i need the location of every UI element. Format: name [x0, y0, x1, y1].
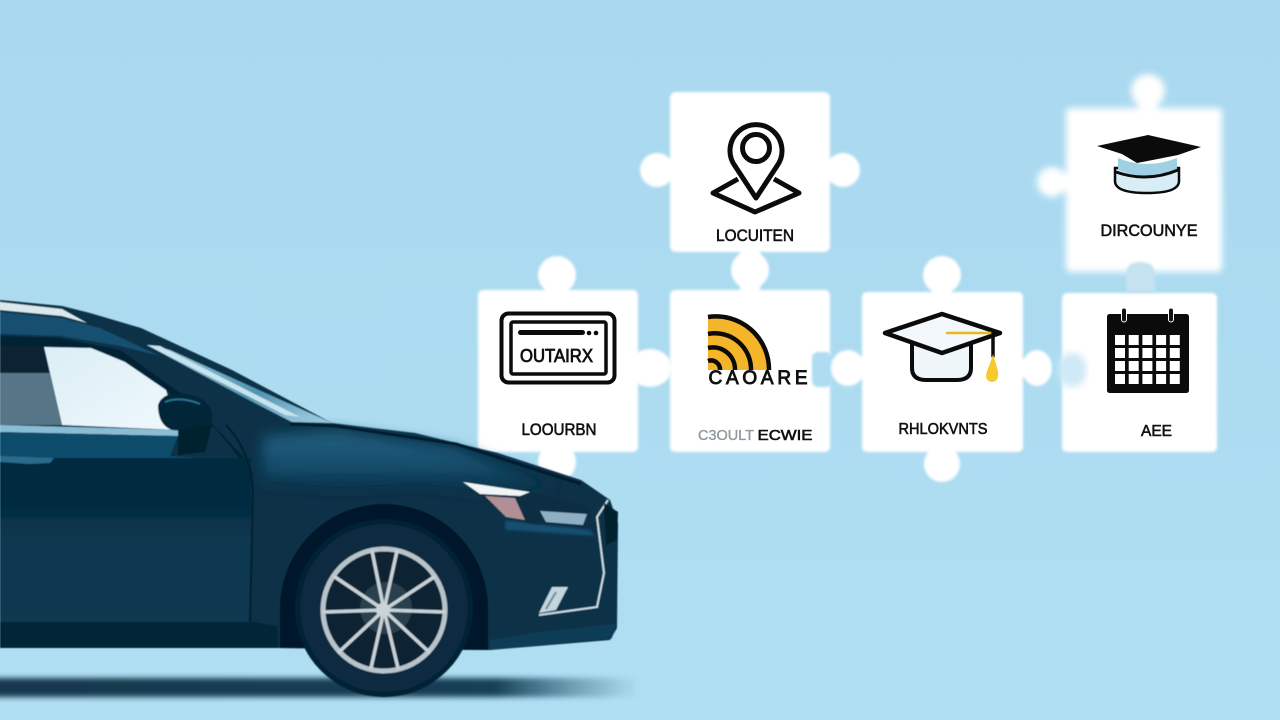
icon: mortarboard [1097, 135, 1201, 193]
puzzle piece: discounts [1037, 74, 1222, 292]
door seam [226, 425, 253, 622]
label: age piece: AEE [1141, 423, 1172, 440]
label: coverage piece: ECWIE [758, 427, 812, 444]
hood sheen [262, 430, 555, 492]
wheel arch [280, 504, 488, 650]
bumper highlight [505, 520, 595, 536]
puzzle piece: location [640, 92, 860, 295]
headlight [463, 482, 589, 526]
notch in piece edge [812, 352, 832, 387]
label: discounts piece: DIRCOUNYE [1100, 221, 1198, 240]
rear pillar [0, 345, 62, 425]
puzzle piece: card [478, 256, 672, 481]
icon: calendar [1107, 308, 1189, 393]
puzzle piece: coverage [670, 251, 832, 452]
puzzle piece: age [1058, 293, 1217, 452]
fog lamp [539, 587, 568, 613]
door panel [0, 458, 251, 622]
grille [604, 503, 618, 545]
icon: signal arcs [708, 316, 769, 370]
side mirror [158, 393, 212, 430]
sill [0, 622, 278, 648]
ground shadow [0, 678, 640, 697]
icon: map pin [713, 125, 799, 212]
hood crease [290, 424, 581, 484]
label: coverage piece: C3OULT [698, 427, 754, 444]
icon wordmark: CAOARE [708, 368, 808, 389]
car [0, 300, 618, 697]
brake disc [360, 582, 412, 634]
card text: OUTAIRX [520, 346, 593, 366]
icon: card [502, 314, 614, 382]
belt line [0, 425, 178, 436]
hub [376, 603, 390, 617]
spokes [324, 551, 444, 668]
roof strip [0, 302, 87, 323]
windshield [147, 345, 332, 423]
icon: graduation cap [885, 314, 1000, 382]
car body [0, 300, 618, 650]
grille trim [539, 500, 608, 615]
faded connector tab [1126, 262, 1155, 292]
front wheel [295, 519, 473, 697]
door handle [0, 456, 54, 464]
label: card piece: LOOURBN [522, 421, 596, 439]
roof sheen [0, 312, 160, 356]
side window glass [44, 347, 178, 430]
door upper sheen [0, 432, 252, 462]
notch in piece edge [1058, 353, 1086, 387]
interior seat [0, 373, 62, 425]
label: coverage piece [698, 427, 812, 444]
tyre [295, 519, 473, 697]
bumper lip [490, 624, 616, 650]
label: location: LOCUITEN [716, 226, 794, 245]
side window frame [0, 336, 254, 476]
label: education piece: RHLOKVNTS [898, 421, 988, 438]
puzzle piece: education [831, 256, 1052, 482]
rim [323, 549, 445, 671]
